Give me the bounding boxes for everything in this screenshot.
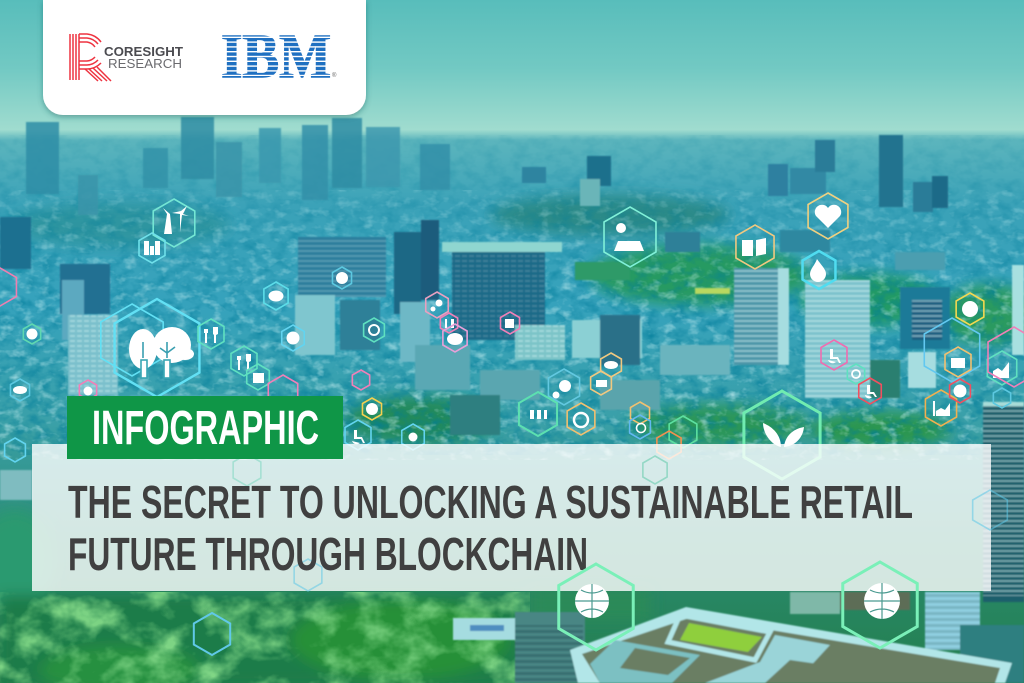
logo: Coresight Research: RESEARCH [108,56,182,71]
label: infographic: INFOGRAPHIC [92,402,319,455]
icon: pink hexagon left edge [0,268,16,306]
green tree masses [0,195,1024,683]
icon: water drop hexagon [803,251,835,289]
logo: IBM: ® [332,72,337,79]
icon: heart hexagon [808,193,848,239]
icon: globe and leaf hexagons [194,562,917,655]
icon: book hexagon [736,225,774,269]
icon: coresight R mark [70,34,111,81]
banner panel: FUTURE THROUGH BLOCKCHAIN [68,528,588,580]
icon: small hexagons left cluster [5,267,520,462]
mid right buildings [734,268,789,365]
icon: cutlery hexagons [198,319,257,376]
logo: IBM: IBM [221,23,331,91]
faint hexagons through panel [233,454,1007,591]
icon: trees large hexagon [101,299,199,397]
mid buildings left [60,264,110,314]
icon: leaf and hand large hexagon [744,391,820,479]
label: infographic [67,396,343,459]
hexagon icon network [0,193,1024,479]
lower-left building [515,612,585,683]
banner panel [32,444,1007,591]
icon: wind turbines hexagon [153,199,195,247]
icon: centre cluster hexagons [519,353,697,459]
icon: right cluster hexagons [821,293,1024,426]
icon: solar panel hexagon [604,207,656,267]
distant skyline [26,117,450,215]
logo: Coresight Research [70,34,183,81]
icon: family hexagon [139,233,165,263]
rooftop [570,607,1012,683]
logo card [43,0,366,115]
logo: Coresight Research: CORESIGHT [104,44,183,59]
